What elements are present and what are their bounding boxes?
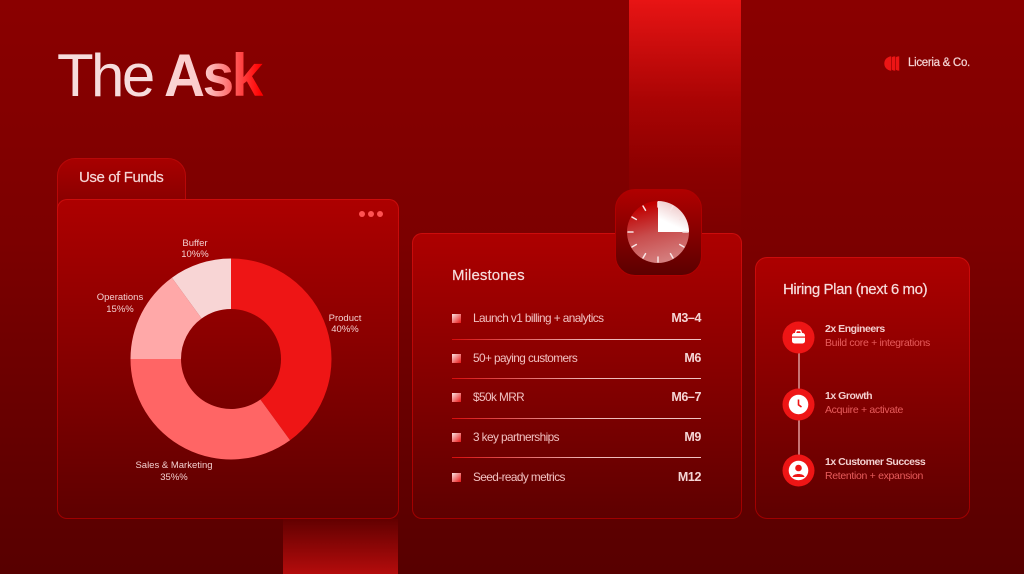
- milestone 2: 50+ paying customers: [473, 351, 577, 365]
- milestone 4: M9: [684, 430, 701, 444]
- milestone 1: Launch v1 billing + analytics: [473, 311, 603, 325]
- milestones heading: Milestones: [452, 267, 525, 284]
- label: product: 40%%: [331, 324, 359, 335]
- bright quadrant: [658, 201, 689, 232]
- donut chart: [130, 258, 332, 460]
- milestone 4: 3 key partnerships: [473, 430, 559, 444]
- hire: growth: 1x Growth: [825, 390, 872, 402]
- milestone 3: M6–7: [671, 390, 701, 404]
- label: buffer: [181, 238, 209, 260]
- segment: buffer: [172, 258, 231, 319]
- hire: customer success: Retention + expansion: [825, 470, 923, 482]
- segment: sales and marketing: [130, 359, 290, 459]
- label: sales and marketing: [135, 460, 213, 483]
- milestone 5: M12: [678, 470, 701, 484]
- hire: growth: Acquire + activate: [825, 404, 903, 416]
- window dots: [359, 211, 383, 217]
- segment: product: [231, 258, 331, 440]
- panel: use of funds: [57, 199, 399, 519]
- milestone 3: $50k MRR: [473, 390, 524, 404]
- milestone 2: M6: [684, 351, 701, 365]
- bottom vertical band: [283, 519, 398, 574]
- title: The: The: [57, 42, 153, 109]
- milestone 2: [452, 351, 701, 365]
- label: product: [329, 313, 362, 335]
- title: Ask: Ask: [164, 42, 261, 109]
- hire: customer success: [782, 454, 926, 486]
- milestone 1: [452, 311, 702, 325]
- brand name: Liceria & Co.: [908, 57, 970, 69]
- label: sales and marketing: 35%%: [160, 472, 188, 483]
- label: buffer: 10%%: [181, 249, 209, 260]
- top vertical band: [629, 0, 741, 236]
- label: operations: 15%%: [106, 304, 134, 315]
- milestone 4: [452, 430, 701, 444]
- tab label: Use of Funds: [79, 169, 163, 186]
- tab: Use of Funds: [57, 158, 186, 208]
- icon: clock: [782, 388, 814, 420]
- label: product: Product: [329, 313, 361, 324]
- milestone 5: Seed-ready metrics: [473, 470, 565, 484]
- hire: customer success: 1x Customer Success: [825, 456, 925, 468]
- panel: hiring plan: [755, 257, 970, 519]
- icon: briefcase: [782, 322, 814, 354]
- title: [57, 42, 264, 109]
- label: operations: [97, 292, 143, 315]
- logo: [884, 56, 970, 71]
- milestone 1: M3–4: [671, 311, 701, 325]
- segment: operations: [130, 278, 202, 359]
- icon: person: [782, 454, 814, 486]
- label: buffer: Buffer: [182, 238, 208, 249]
- panel: milestones: [412, 233, 742, 519]
- hire: engineers: [782, 322, 930, 354]
- label: operations: Operations: [97, 292, 143, 303]
- milestone 3: [452, 390, 701, 404]
- icon: clock tile: [615, 189, 702, 276]
- hire: engineers: Build core + integrations: [825, 337, 930, 349]
- hire: engineers: 2x Engineers: [825, 323, 885, 335]
- hiring plan heading: Hiring Plan (next 6 mo): [783, 281, 927, 298]
- clock face: [627, 201, 689, 263]
- hire: growth: [782, 388, 903, 420]
- milestone 5: [452, 470, 701, 484]
- icon: logo mark: [884, 56, 900, 71]
- label: sales and marketing: Sales & Marketing: [135, 460, 213, 471]
- timeline connector: [798, 340, 800, 460]
